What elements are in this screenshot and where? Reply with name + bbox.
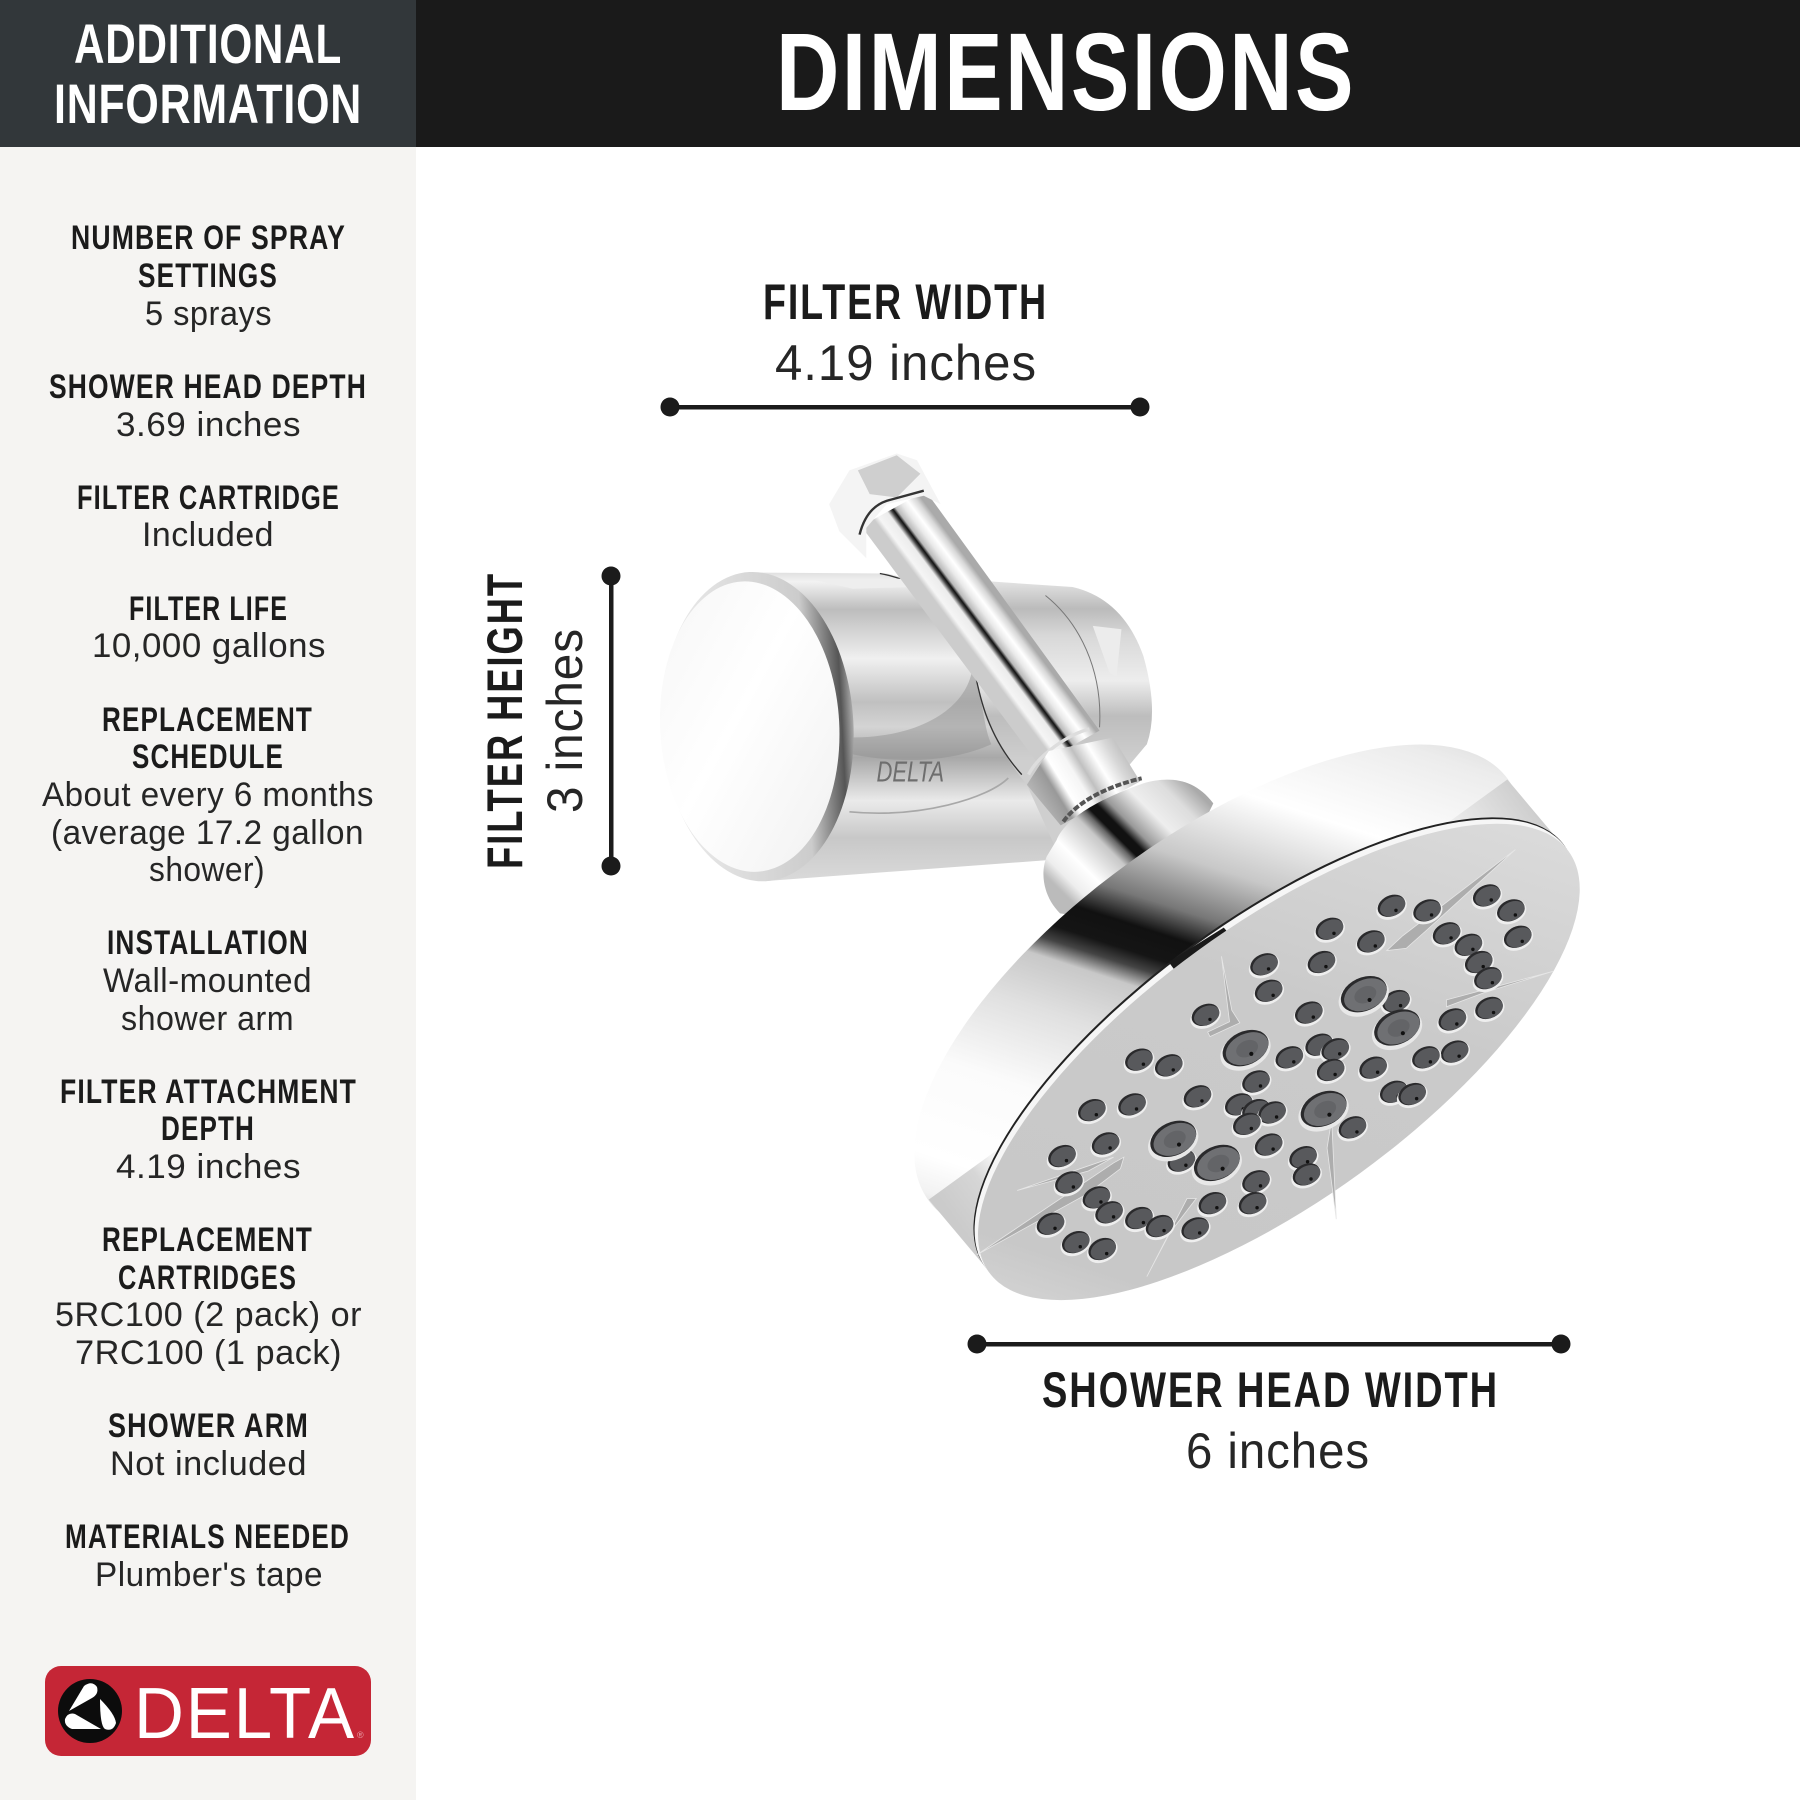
spec: replacement schedule — [42, 701, 374, 889]
filter end cap — [653, 567, 861, 886]
header bar: dimensions title — [416, 0, 1800, 147]
dimension: filter height label: FILTER HEIGHT — [477, 572, 533, 869]
header bar: additional information — [0, 0, 416, 147]
filter brand mark: DELTA — [876, 756, 944, 788]
sidebar panel background — [0, 147, 416, 1800]
spec: replacement schedule: REPLACEMENT — [102, 701, 313, 739]
spec: installation: INSTALLATION — [107, 924, 309, 962]
spec: filter cartridge — [77, 479, 340, 554]
spec: replacement schedule: SCHEDULE — [132, 738, 284, 776]
dimension: shower head width label: 6 inches — [1186, 1423, 1370, 1479]
Delta logo — [45, 1666, 371, 1756]
dimension line: filter width — [660, 398, 1150, 416]
spec: replacement cartridges — [55, 1221, 362, 1372]
lower arm — [1027, 737, 1140, 825]
spec: installation: Wall-mounted — [103, 962, 312, 1000]
header bar: additional information: ADDITIONAL — [74, 12, 342, 75]
spec: number of spray settings: SETTINGS — [138, 257, 278, 295]
dimension: filter height label: 3 inches — [537, 628, 593, 813]
filter body right section — [920, 581, 1152, 861]
dimension: filter height label — [477, 572, 593, 869]
spec: shower head depth: SHOWER HEAD DEPTH — [49, 368, 367, 406]
spec: filter attachment depth — [60, 1073, 357, 1186]
spec: replacement schedule: shower) — [149, 851, 265, 889]
spec: shower arm: Not included — [110, 1445, 307, 1483]
spec: replacement schedule: (average 17.2 gallon — [51, 814, 364, 852]
spec: shower arm: SHOWER ARM — [108, 1407, 309, 1445]
spec: filter cartridge: FILTER CARTRIDGE — [77, 479, 340, 517]
shower arm — [861, 491, 1100, 764]
spec: shower head depth — [49, 368, 367, 444]
dimension: filter width label: FILTER WIDTH — [763, 274, 1048, 330]
Delta logo: ® — [357, 1730, 364, 1740]
spec: number of spray settings: NUMBER OF SPRAY — [71, 219, 346, 257]
face spoke marks — [977, 850, 1553, 1277]
dimension: filter width label — [763, 274, 1048, 391]
spec: filter attachment depth: FILTER ATTACHMENT — [60, 1073, 357, 1111]
dimension line: filter height — [602, 566, 620, 876]
shower head — [837, 654, 1650, 1384]
spec: installation — [103, 924, 312, 1038]
filter body — [751, 572, 1061, 881]
spec: replacement cartridges: CARTRIDGES — [118, 1259, 297, 1297]
spec: filter attachment depth: 4.19 inches — [116, 1148, 301, 1186]
spec: number of spray settings — [71, 219, 346, 333]
dimension: filter width label: 4.19 inches — [775, 335, 1037, 391]
spray nozzles — [1031, 880, 1537, 1268]
spec: number of spray settings: 5 sprays — [145, 295, 272, 333]
spec: shower arm — [108, 1407, 309, 1483]
spec: shower head depth: 3.69 inches — [116, 406, 301, 444]
spec: filter cartridge: Included — [142, 516, 274, 554]
spec: materials needed: Plumber's tape — [95, 1556, 323, 1594]
hex nut — [829, 454, 941, 558]
dimension: shower head width label: SHOWER HEAD WIDTH — [1042, 1362, 1499, 1418]
arm ring — [1029, 729, 1089, 775]
header bar: additional information: INFORMATION — [54, 72, 362, 135]
spec: filter life — [92, 590, 326, 665]
head rim lines — [904, 734, 1646, 1379]
spec: materials needed: MATERIALS NEEDED — [65, 1518, 350, 1556]
spec: filter life: 10,000 gallons — [92, 627, 326, 665]
spec: replacement cartridges: 5RC100 (2 pack) or — [55, 1296, 362, 1334]
spec: replacement cartridges: REPLACEMENT — [102, 1221, 313, 1259]
filter and arm — [653, 454, 1152, 886]
spec: materials needed — [65, 1518, 350, 1594]
spec: replacement schedule: About every 6 months — [42, 776, 374, 814]
spec: filter life: FILTER LIFE — [129, 590, 288, 628]
head body cylinder — [837, 654, 1599, 1325]
head face plate — [908, 740, 1650, 1384]
dimension line: shower head width — [968, 1334, 1570, 1354]
header bar: dimensions title: DIMENSIONS — [776, 11, 1356, 134]
spec: replacement cartridges: 7RC100 (1 pack) — [75, 1334, 342, 1372]
collar — [1043, 778, 1213, 927]
spec: installation: shower arm — [121, 1000, 294, 1038]
product illustration: shower head with filter — [653, 454, 1650, 1384]
spec: filter attachment depth: DEPTH — [161, 1110, 255, 1148]
Delta logo: DELTA — [134, 1674, 356, 1754]
dimension: shower head width label — [1042, 1362, 1499, 1479]
